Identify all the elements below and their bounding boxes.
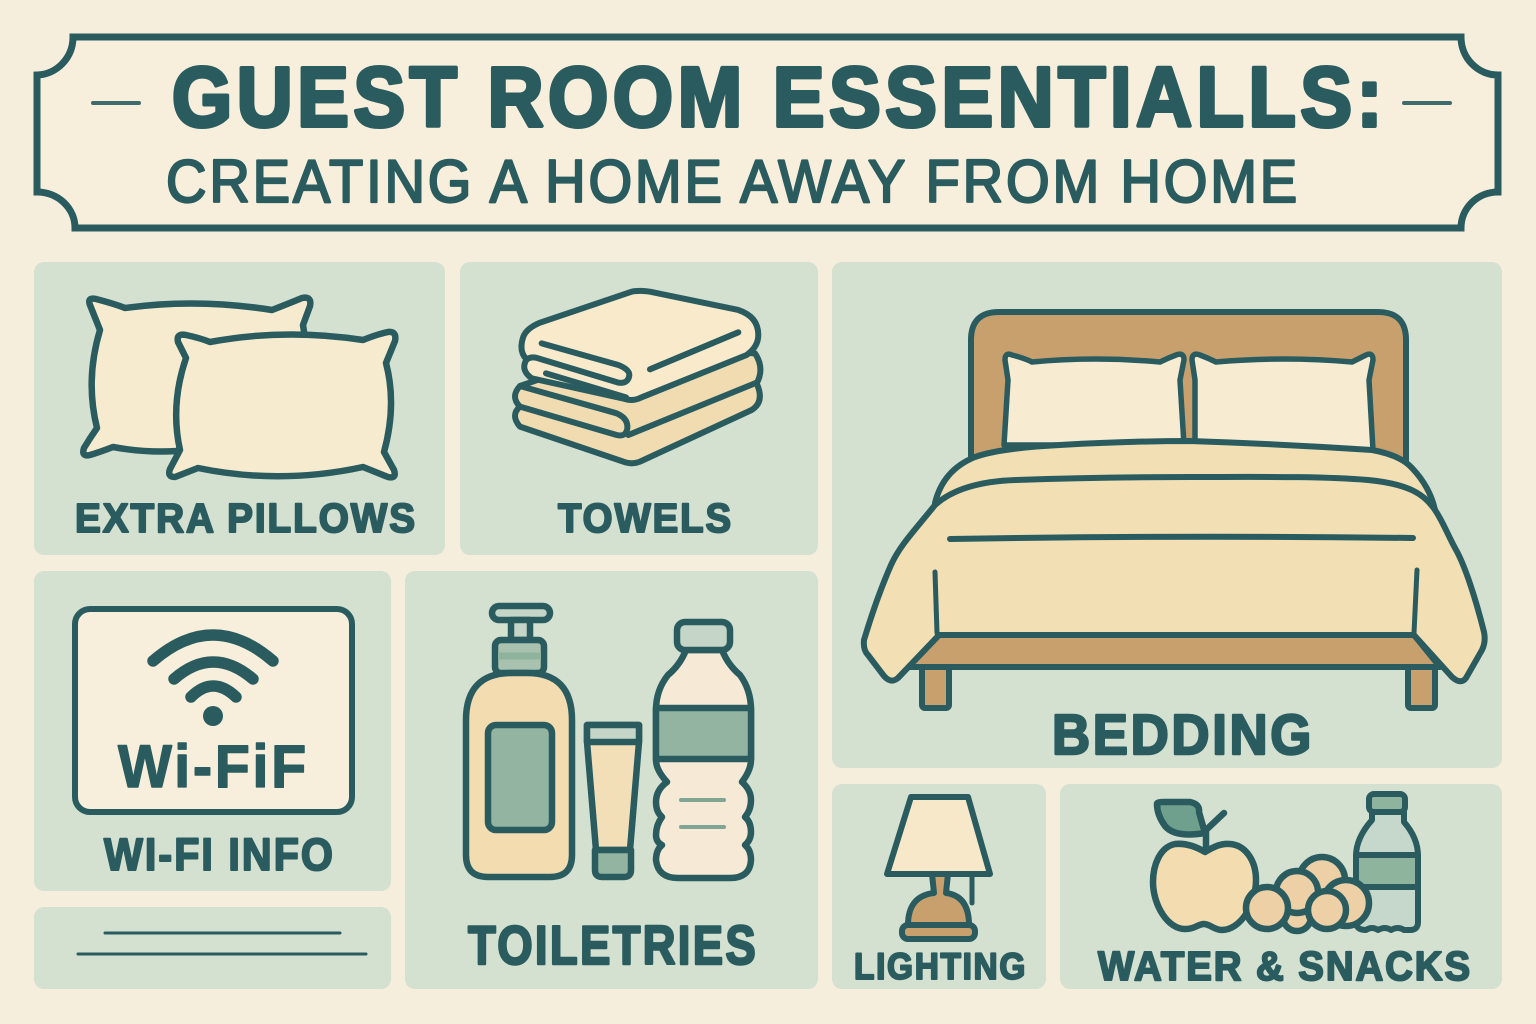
pillows on bed — [1004, 354, 1373, 450]
label: bedding: BEDDING — [1052, 703, 1314, 767]
panel: towels — [460, 262, 818, 555]
panel: wi-fi info — [34, 571, 391, 891]
icon: snacks — [1246, 857, 1369, 931]
subtitle: CREATING A HOME AWAY FROM HOME — [166, 148, 1300, 215]
title banner — [37, 37, 1498, 228]
panel: bedding — [832, 262, 1502, 768]
icon: bed — [864, 312, 1485, 708]
label: towels: TOWELS — [558, 495, 733, 541]
panel: lighting — [832, 784, 1046, 989]
icon: apple — [1153, 802, 1256, 930]
bed legs — [922, 667, 1435, 708]
panel: toiletries — [405, 571, 818, 989]
icon: tube — [587, 725, 639, 877]
icon: water bottle small — [1356, 794, 1418, 930]
label: extra pillows: EXTRA PILLOWS — [75, 495, 417, 541]
panel: water and snacks — [1060, 784, 1502, 989]
icon: stacked towels — [515, 291, 760, 463]
icon: pillows — [83, 298, 395, 477]
duvet top fold — [935, 441, 1435, 560]
icon: table lamp — [887, 797, 990, 939]
label: wi-fi info: WI-FI INFO — [104, 829, 335, 880]
panel: extra pillows — [34, 262, 445, 555]
icon: wi-fi sign — [75, 609, 352, 812]
duvet — [864, 477, 1485, 681]
wi-fi arcs — [153, 635, 273, 697]
headboard — [971, 312, 1406, 465]
label: toiletries: TOILETRIES — [468, 914, 758, 976]
panel: blank note lines — [34, 907, 391, 989]
label: lighting: LIGHTING — [854, 946, 1027, 987]
main title: GUEST ROOM ESSENTIALLS: — [172, 50, 1387, 144]
icon: water bottle — [656, 622, 751, 878]
label: water and snacks: WATER & SNACKS — [1098, 943, 1472, 989]
icon: pump bottle — [466, 606, 572, 877]
sign text: Wi-FiF — [118, 733, 309, 800]
bed base — [908, 635, 1440, 667]
